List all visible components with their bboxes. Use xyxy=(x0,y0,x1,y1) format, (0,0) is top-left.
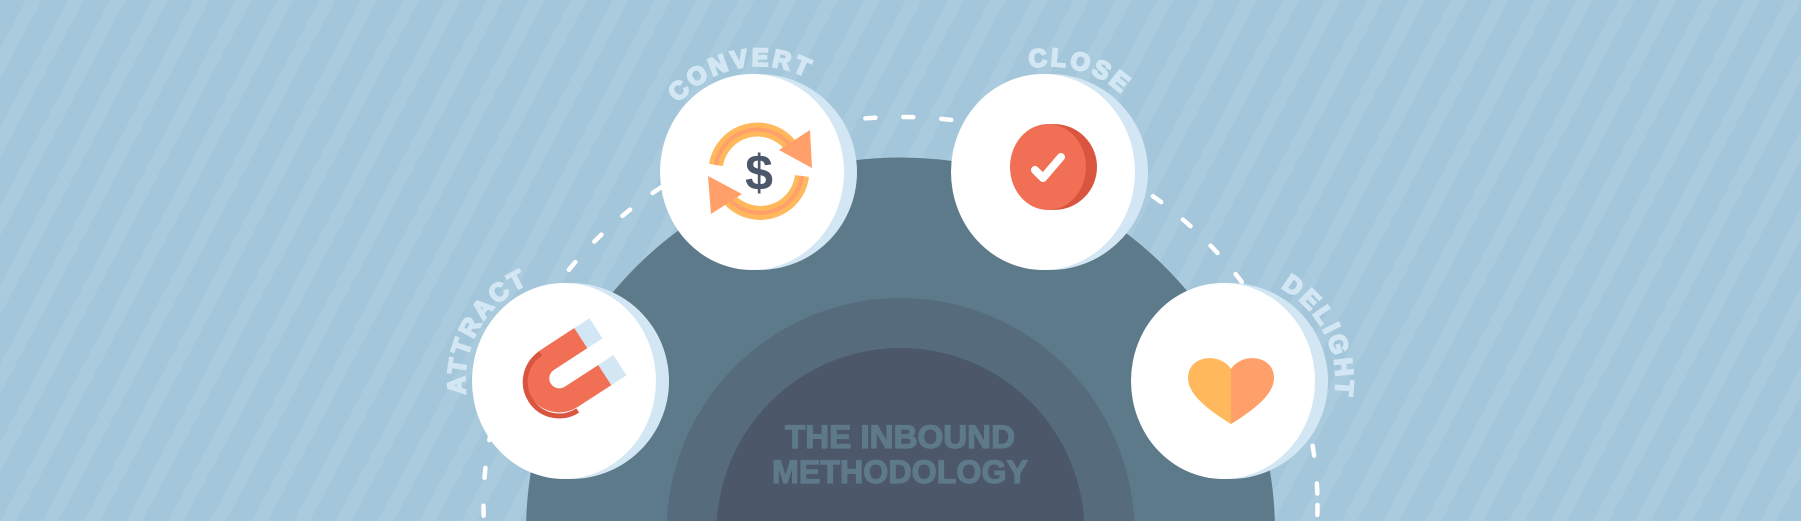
label: attract: ATTRACT xyxy=(446,268,523,395)
arch: middle xyxy=(666,298,1134,521)
label: close: CLOSE xyxy=(1028,48,1132,94)
arch: inner xyxy=(716,348,1084,521)
icon: heart xyxy=(1188,358,1274,424)
icon: circular arrows with dollar: $ xyxy=(745,145,773,201)
icon: circular arrows with dollar xyxy=(708,130,812,214)
arch: outer xyxy=(526,158,1275,521)
stage: delight xyxy=(1131,283,1328,479)
stage: close xyxy=(951,74,1148,270)
icon: magnet xyxy=(511,318,628,429)
icon: check xyxy=(1010,124,1097,210)
label: delight: DELIGHT xyxy=(1281,272,1354,397)
stage: convert xyxy=(660,74,857,270)
title text: THE INBOUND xyxy=(785,419,1015,455)
label: convert: CONVERT xyxy=(668,48,814,100)
stage: attract xyxy=(472,283,669,479)
labels xyxy=(446,48,1354,397)
title text xyxy=(772,419,1028,490)
title text: METHODOLOGY xyxy=(772,454,1028,490)
dashed path xyxy=(484,117,1318,521)
